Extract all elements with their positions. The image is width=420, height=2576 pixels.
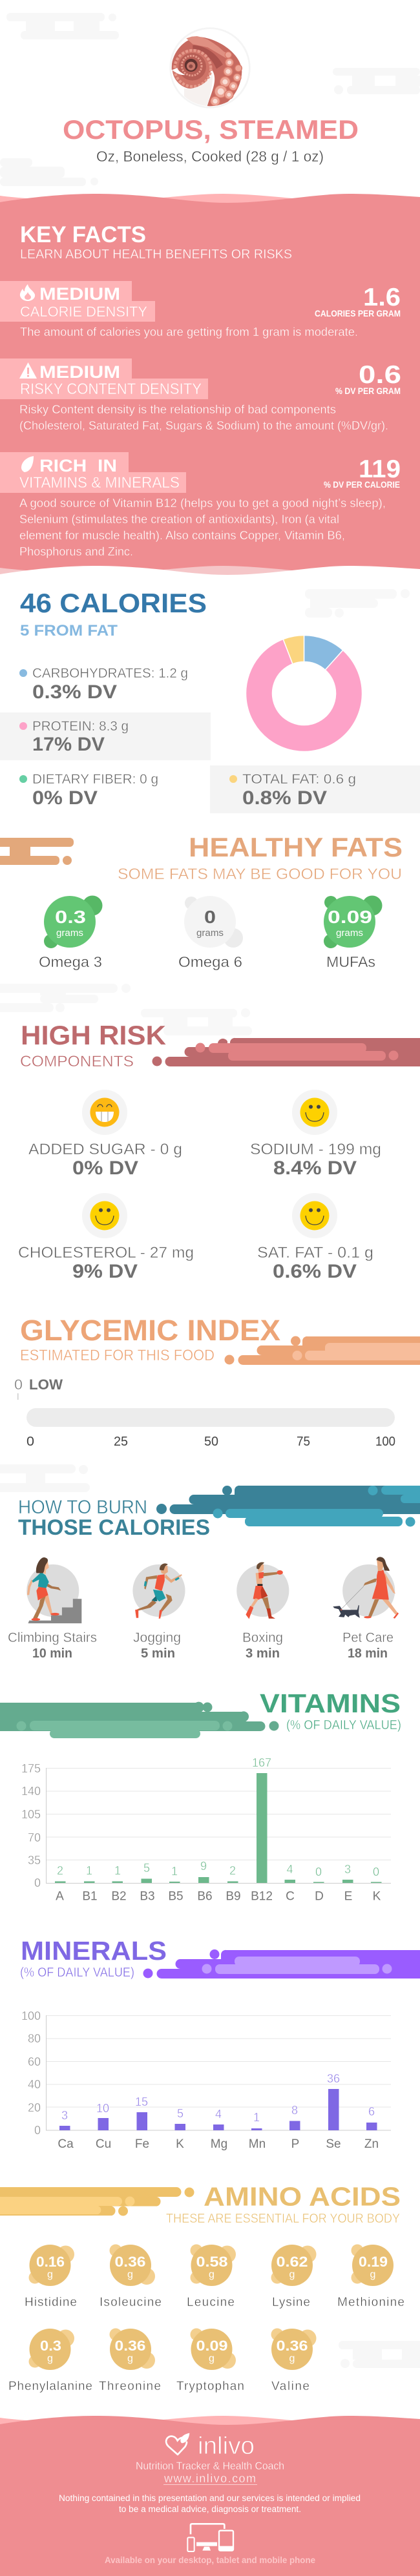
chart: calorie donut [246,636,362,752]
fact: calorie density [0,281,401,338]
chart: minerals bars: 5 [177,2107,184,2120]
fat: omega 6: grams [196,928,224,939]
chart: vitamins bars: 1 [114,1864,121,1877]
amino: methionine: g [370,2269,375,2280]
chart: minerals bars: 1 [253,2111,260,2124]
chart: vitamins bars: B9 [226,1890,241,1903]
heading: how to burn: HOW TO BURN [18,1497,147,1518]
chart: vitamins bars: 3 [344,1863,351,1876]
amino: threonine: Threonine [99,2380,161,2393]
chart: vitamins bars: 1 [171,1865,178,1878]
panel: vitamins [0,1688,401,1903]
chart: vitamins bars: B6 [197,1890,213,1903]
legend: total fat: TOTAL FAT: 0.6 g [242,772,356,787]
amino: tryptophan: 0.09 [196,2338,227,2354]
fact: risky content density: 0.6 [359,361,401,389]
decoration: ribbon [0,1702,279,1738]
amino: methionine: Methionine [337,2296,404,2309]
chart: vitamins bars: 105 [21,1808,41,1821]
subheading: daily value: (% OF DAILY VALUE) [20,1966,134,1980]
amino: leucine: 0.58 [196,2254,227,2270]
fat: mufas [324,895,383,970]
chart: minerals bars: 60 [28,2055,41,2068]
heading: minerals: MINERALS [21,1936,167,1966]
fat: omega 3: 0.3 [55,907,86,927]
risk: sodium [250,1090,381,1179]
chart: vitamins bars: B1 [82,1890,98,1903]
fact: rich in vitamins and minerals: VITAMINS & MINERALS [19,474,180,492]
activity: boxing: Boxing [242,1630,283,1645]
amino: leucine: g [209,2269,215,2280]
fact: rich in vitamins and minerals: Selenium (stimulates the creation of antioxidants), Iron (a vital [19,513,339,526]
risk: added sugar: 0% DV [72,1158,138,1179]
chart: vitamins bars: B2 [111,1890,127,1903]
icon: leaf [21,456,34,472]
panel: footer [0,2416,420,2576]
amino: phenylalanine [8,2329,92,2393]
amino: methionine: 0.19 [359,2254,388,2270]
fact: calorie density: MEDIUM [39,284,120,304]
legend: carbohydrates: 0.3% DV [32,681,117,703]
chart: minerals bars: Fe [135,2137,149,2151]
activity: boxing: 3 min [246,1646,280,1661]
subheading: key facts: LEARN ABOUT HEALTH BENEFITS OR RISKS [20,247,292,262]
subtitle: Oz, Boneless, Cooked (28 g / 1 oz) [96,148,324,165]
chart: vitamins bars [21,1756,391,1903]
chart: minerals bars: 3 [61,2109,68,2122]
heading: calories: 46 CALORIES [20,588,207,618]
fat: omega 6 [178,896,243,970]
gauge axis labels: 0 [26,1435,34,1449]
amino: phenylalanine: g [47,2353,53,2364]
disclaimer: to be a medical advice, diagnosis or treatment. [119,2504,301,2514]
chart: minerals bars: Mg [211,2137,227,2151]
fact: calorie density: CALORIES PER GRAM [315,308,401,318]
fat: mufas: grams [336,928,363,939]
amino: histidine [25,2245,77,2309]
heading: those calories: THOSE CALORIES [18,1515,210,1540]
tagline: Nutrition Tracker & Health Coach [136,2460,284,2472]
title: OCTOPUS, STEAMED [63,114,359,145]
fact: rich in vitamins and minerals [0,452,401,558]
availability note: Available on your desktop, tablet and mobile phone [105,2555,315,2565]
amino: threonine: 0.36 [115,2338,146,2354]
chart: minerals bars: 4 [215,2108,222,2121]
amino: phenylalanine: Phenylalanine [8,2380,92,2393]
chart: minerals bars: 100 [21,2010,41,2022]
legend: carbohydrates [19,666,188,703]
amino: threonine: g [127,2353,133,2364]
legend: protein: PROTEIN: 8.3 g [32,719,129,734]
fact: risky content density: Risky Content density is the relationship of bad components [19,403,336,416]
fat: omega 3 [39,895,102,970]
risk: cholesterol: 9% DV [72,1261,138,1282]
chart: vitamins bars: B3 [140,1890,155,1903]
icon: woman walking dog [333,1557,399,1619]
chart: vitamins bars: 5 [143,1862,150,1875]
decorative cloud [0,1464,90,1492]
fact: calorie density: The amount of calories you are getting from 1 gram is moderate. [20,326,358,338]
legend: dietary fiber: 0% DV [32,787,98,809]
risk: saturated fat: SAT. FAT - 0.1 g [257,1244,373,1262]
chart: vitamins bars: C [286,1890,295,1903]
icon: woman on stairs [26,1557,81,1623]
chart: vitamins bars: A [56,1890,64,1903]
subheading: essential: THESE ARE ESSENTIAL FOR YOUR BODY [166,2212,400,2226]
activity: pet care: Pet Care [342,1630,394,1645]
amino: tryptophan [176,2328,244,2393]
panel: minerals [20,1936,420,2151]
icon: warning triangle [19,362,37,379]
fat: omega 6: Omega 6 [178,953,242,970]
chart: minerals bars: 20 [28,2101,41,2114]
fat: omega 3: Omega 3 [39,953,102,970]
risk: saturated fat: 0.6% DV [273,1261,357,1282]
panel: glycemic index [14,1314,420,1449]
subheading: estimated: ESTIMATED FOR THIS FOOD [20,1347,215,1364]
legend: dietary fiber: DIETARY FIBER: 0 g [32,772,158,787]
chart: minerals bars: K [176,2137,184,2151]
fact: risky content density [0,358,401,432]
legend: protein: 17% DV [32,734,105,755]
fat: omega 3: grams [56,928,83,939]
subheading: components: COMPONENTS [20,1053,134,1070]
fact: risky content density: (Cholesterol, Saturated Fat, Sugars & Sodium) to the amount (%DV/gr). [19,419,388,432]
panel: key facts [0,194,420,585]
chart: vitamins bars: 70 [28,1831,41,1844]
amino: histidine: g [47,2269,53,2280]
chart: vitamins bars: K [373,1890,381,1903]
chart: minerals bars: 80 [28,2032,41,2045]
amino: histidine: Histidine [25,2296,77,2309]
amino: lysine: 0.62 [277,2254,308,2270]
heading: healthy fats: HEALTHY FATS [189,832,403,862]
amino: isoleucine: 0.36 [115,2254,146,2270]
chart: minerals bars: 10 [96,2102,109,2115]
activity: climbing stairs: Climbing Stairs [8,1630,97,1645]
amino: histidine: 0.16 [36,2254,65,2270]
panel: amino acids [0,2182,420,2393]
amino: lysine: g [289,2269,295,2280]
chart: vitamins bars: B5 [168,1890,184,1903]
fact: risky content density: MEDIUM [39,362,120,382]
chart: minerals bars: 0 [34,2124,41,2137]
risk: added sugar: ADDED SUGAR - 0 g [28,1141,182,1158]
activity: climbing stairs [8,1557,97,1661]
decorative clouds: mid [0,984,252,1035]
chart: vitamins bars: 140 [21,1785,41,1798]
subheading: healthy fats: SOME FATS MAY BE GOOD FOR YOU [118,866,402,883]
chart: minerals bars: 40 [28,2078,41,2091]
logo: wordmark: inlivo [198,2433,255,2460]
fact: risky content density: % DV PER GRAM [335,386,401,396]
fact: calorie density: CALORIE DENSITY [20,304,147,320]
chart: vitamins bars: D [315,1890,324,1903]
gauge axis labels [26,1435,395,1449]
chart: minerals bars: Zn [364,2137,379,2151]
panel: high risk components [18,1020,420,1282]
activity: jogging: 5 min [141,1646,175,1661]
amino: lysine [271,2245,317,2309]
icon: jogger [132,1563,185,1619]
icon: boxer [236,1562,289,1619]
amino: isoleucine: g [127,2269,133,2280]
fact: rich in vitamins and minerals: RICH IN [39,456,117,475]
heading: high risk: HIGH RISK [21,1020,166,1050]
legend: dietary fiber [19,772,158,809]
logo: heart and leaf [166,2433,189,2455]
chart: vitamins bars: B12 [251,1890,273,1903]
legend: total fat [210,765,420,813]
heading: amino acids: AMINO ACIDS [204,2182,401,2212]
activity: pet care [333,1557,399,1661]
decoration: ribbon [225,1336,420,1365]
amino: phenylalanine: 0.3 [40,2338,61,2354]
amino: leucine [187,2244,236,2309]
activity: pet care: 18 min [348,1646,388,1661]
chart: vitamins bars: 9 [200,1860,207,1873]
fact: rich in vitamins and minerals: element for muscle health). Also contains Copper, Vitamin B6, [19,529,345,542]
gauge label: LOW [29,1376,63,1393]
gauge value: 0 [14,1376,23,1393]
fact: rich in vitamins and minerals: 119 [359,455,401,483]
amino: threonine [99,2328,161,2393]
chart: vitamins bars: E [344,1890,352,1903]
fat: omega 6: 0 [204,907,216,927]
subheading: from fat: 5 FROM FAT [20,622,118,639]
risk: saturated fat [257,1193,373,1282]
chart: vitamins bars: 35 [28,1854,41,1867]
amino: leucine: Leucine [187,2296,235,2309]
heading: glycemic index: GLYCEMIC INDEX [20,1314,280,1347]
fat: mufas: MUFAs [326,953,375,970]
amino: valine: g [289,2353,295,2364]
activity: jogging: Jogging [133,1630,181,1645]
icon: flame [20,284,35,301]
header decorative clouds [0,13,420,186]
chart: minerals bars: 6 [368,2105,375,2118]
chart: vitamins bars: 2 [57,1864,63,1877]
fact: rich in vitamins and minerals: Phosphorus and Zinc. [19,545,133,558]
chart: minerals bars: 36 [327,2072,340,2085]
amino: isoleucine [100,2244,162,2309]
fact: rich in vitamins and minerals: A good source of Vitamin B12 (helps you to get a good night’s sleep), [19,497,386,510]
chart: vitamins bars: 175 [21,1762,41,1775]
activity: jogging [132,1563,185,1661]
amino: valine [271,2328,317,2393]
amino: tryptophan: Tryptophan [176,2380,244,2393]
panel: how to burn [8,1486,420,1661]
activity: boxing [236,1562,289,1661]
gauge axis labels: 75 [297,1435,310,1449]
chart: minerals bars: Se [326,2137,341,2151]
gauge bar [26,1408,395,1427]
chart: vitamins bars: 4 [286,1863,293,1876]
amino: valine: Valine [271,2380,310,2393]
chart: minerals bars: 15 [135,2095,148,2108]
amino: valine: 0.36 [277,2338,308,2354]
chart: minerals bars: 8 [291,2104,298,2117]
fact: calorie density: 1.6 [363,284,401,311]
legend: total fat: 0.8% DV [242,787,327,809]
chart: minerals bars: Cu [96,2137,111,2151]
legend: protein [0,712,211,760]
chart: vitamins bars: 0 [315,1865,322,1878]
disclaimer [59,2493,361,2514]
legend: carbohydrates: CARBOHYDRATES: 1.2 g [32,666,188,681]
icon: devices [187,2524,233,2551]
chart: vitamins bars: 0 [34,1876,41,1889]
chart: minerals bars: Ca [58,2137,74,2151]
activity: climbing stairs: 10 min [32,1646,72,1661]
risk: added sugar [28,1090,182,1179]
heading: key facts: KEY FACTS [20,222,146,247]
amino: methionine [337,2244,404,2309]
gauge axis labels: 25 [114,1435,128,1449]
gauge axis labels: 100 [375,1435,395,1449]
amino: isoleucine: Isoleucine [100,2296,162,2309]
risk: cholesterol [18,1193,194,1282]
fact: risky content density: RISKY CONTENT DENSITY [20,380,202,398]
amino: tryptophan: g [209,2353,215,2364]
chart: vitamins bars: 1 [86,1864,92,1877]
subheading: daily value: (% OF DAILY VALUE) [286,1718,401,1732]
fact: rich in vitamins and minerals: % DV PER CALORIE [324,479,400,490]
decoration: ribbon [152,1038,420,1066]
decoration: ribbon [0,2187,194,2216]
panel: calories [0,588,420,813]
decoration: ribbon [143,1949,420,1979]
fat: mufas: 0.09 [328,907,372,927]
icon: octopus tentacle photo [171,28,249,108]
chart: vitamins bars: 2 [229,1864,236,1877]
chart: vitamins bars: 167 [252,1756,271,1769]
website: www.inlivo.com [163,2472,256,2485]
amino: lysine: Lysine [272,2296,310,2309]
gauge axis labels: 50 [204,1435,218,1449]
disclaimer: Nothing contained in this presentation and our services is intended or implied [59,2493,361,2503]
decoration: ribbon [156,1486,420,1527]
risk: sodium: SODIUM - 199 mg [250,1141,381,1158]
chart: minerals bars: P [291,2137,299,2151]
panel: healthy fats [0,832,403,970]
risk: sodium: 8.4% DV [273,1158,357,1179]
chart: minerals bars [21,2010,391,2151]
risk: cholesterol: CHOLESTEROL - 27 mg [18,1244,194,1262]
heading: vitamins: VITAMINS [260,1688,401,1718]
chart: vitamins bars: 0 [373,1865,379,1878]
chart: minerals bars: Mn [249,2137,266,2151]
